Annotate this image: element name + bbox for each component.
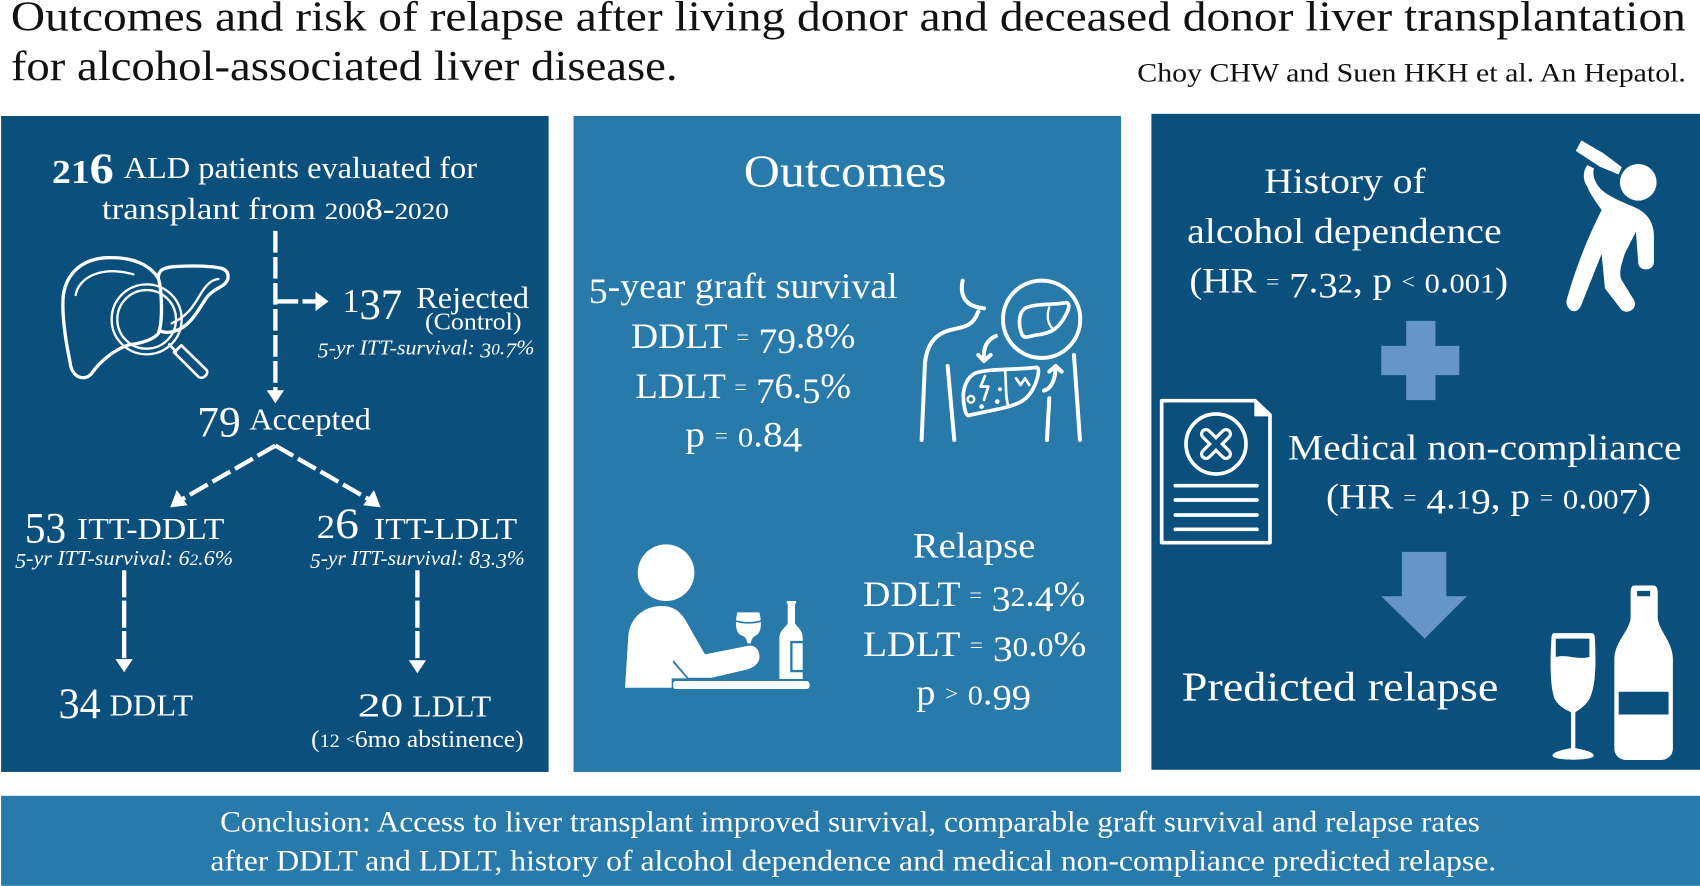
icon: document with cross (1162, 401, 1270, 543)
panel: relapse predictors (1151, 114, 1700, 770)
79 accepted: Accepted (249, 402, 371, 436)
137 rejected: 137 (343, 281, 402, 329)
137 rejected (318, 281, 535, 363)
relapse stats: DDLT = 32.4% (863, 574, 1085, 619)
panel: conclusion: Conclusion: Access to liver transplant improved survival, comparable graft survival and relapse rates (220, 806, 1480, 839)
relapse stats: Relapse (913, 525, 1035, 565)
relapse stats: p > 0.99 (916, 673, 1031, 718)
graft survival stats: DDLT = 79.8% (631, 316, 855, 361)
icon: liver with magnifier (63, 258, 228, 378)
ITT-LDLT group: 5-yr ITT-survival: 8 3.3% (310, 548, 525, 573)
ITT-DDLT group: 5-yr ITT-survival: 6 2.6% (15, 548, 233, 573)
panel: conclusion: after DDLT and LDLT, history of alcohol dependence and medical non-compliance predicted relapse. (210, 845, 1496, 878)
arrow: to rejected (275, 292, 329, 311)
icon: wine glass (1551, 633, 1595, 760)
arrow: to accepted (267, 231, 284, 403)
ITT-LDLT group (310, 500, 525, 573)
79 accepted (197, 398, 371, 446)
medical non-compliance predictor (1288, 428, 1682, 522)
arrow: to LDLT (409, 570, 426, 673)
heading: 216 patients evaluated: 216 (52, 145, 114, 193)
20 LDLT: 20 (358, 688, 403, 725)
icon: wine bottle (1614, 585, 1673, 760)
predicted relapse label: Predicted relapse (1182, 663, 1498, 709)
79 accepted: 79 (197, 398, 241, 446)
medical non-compliance predictor: (HR = 4.19, p = 0.007) (1326, 476, 1651, 522)
citation: Choy CHW and Suen HKH et al. An Hepatol. (1137, 58, 1686, 87)
34 DDLT: DDLT (110, 689, 193, 723)
20 LDLT: LDLT (412, 690, 492, 724)
heading: 216 patients evaluated: ALD patients evaluated for (124, 151, 477, 185)
34 DDLT: 34 (59, 680, 101, 728)
ITT-DDLT group (15, 504, 233, 573)
panel: outcomes (574, 116, 1121, 772)
ITT-DDLT group: 53 (25, 504, 66, 552)
arrow: to DDLT (115, 570, 133, 672)
20 LDLT: (12 <6mo abstinence) (311, 727, 524, 753)
icon: person drinking from bottle (1566, 141, 1657, 312)
icon: torso with liver transplant (922, 281, 1080, 440)
title (11, 0, 1686, 90)
137 rejected: Rejected (416, 281, 529, 315)
ITT-LDLT group: ITT-LDLT (374, 512, 518, 546)
alcohol dependence predictor: (HR = 7.32, p < 0.001) (1189, 261, 1508, 306)
arrow: branch to DDLT and LDLT (170, 446, 381, 507)
ITT-DDLT group: ITT-DDLT (77, 512, 225, 546)
graft survival stats: 5-year graft survival (589, 266, 898, 312)
heading: 216 patients evaluated: transplant from 2008-2020 (102, 192, 449, 226)
alcohol dependence predictor: History of (1264, 161, 1426, 201)
heading: 216 patients evaluated (52, 145, 477, 226)
medical non-compliance predictor: Medical non-compliance (1288, 428, 1682, 468)
panel: conclusion (1, 796, 1700, 886)
20 LDLT (311, 688, 524, 753)
alcohol dependence predictor (1187, 161, 1508, 306)
relapse stats (863, 525, 1086, 718)
alcohol dependence predictor: alcohol dependence (1187, 211, 1502, 251)
relapse stats: LDLT = 30.0% (863, 624, 1086, 669)
137 rejected: (Control) (425, 310, 521, 336)
graft survival stats: LDLT = 76.5% (635, 366, 851, 411)
graft survival stats (589, 266, 898, 460)
title: for alcohol-associated liver disease. (11, 43, 678, 90)
panel: patient flow (1, 116, 549, 772)
ITT-LDLT group: 26 (317, 500, 359, 548)
heading: outcomes: Outcomes (744, 145, 946, 196)
graft survival stats: p = 0.84 (685, 415, 802, 460)
arrow: down to predicted relapse (1381, 552, 1467, 639)
137 rejected: 5-yr ITT-survival: 30.7% (318, 338, 535, 363)
icon: person drinking at table (625, 544, 810, 689)
34 DDLT (59, 680, 193, 728)
icon: plus sign (1381, 321, 1459, 400)
